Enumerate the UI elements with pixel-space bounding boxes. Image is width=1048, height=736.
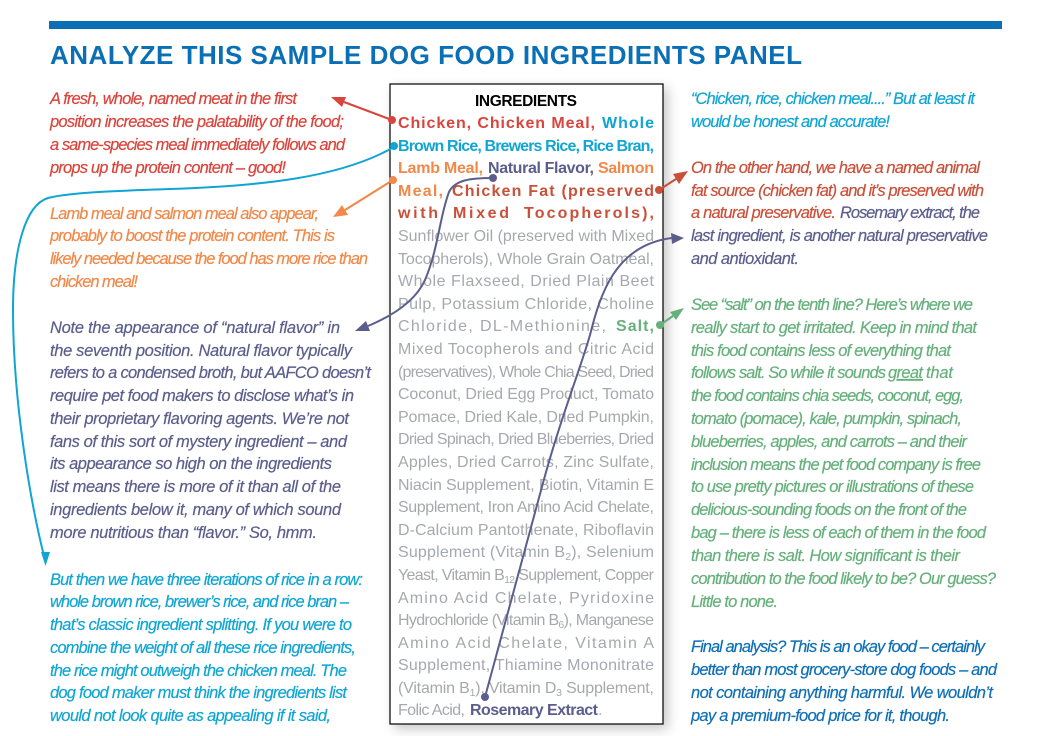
ingredients list: Pulp, Potassium Chloride, Choline [398,296,654,313]
ingredients list: Chicken Fat (preserved [452,183,654,200]
text block: salt on the tenth line (green): contribution to the food likely to be? Our guess? [691,570,997,588]
ingredients list: Brown Rice, Brewers Rice, Rice Bran, [398,138,654,155]
ingredients list: Dried Spinach, Dried Blueberries, Dried [398,431,654,448]
ingredients list: Supplement (Vitamin B [398,544,565,561]
text block: natural flavor (slate): fans of this sort of mystery ingredient – and [50,433,348,451]
arrow: lamb meal to orange note [333,176,397,217]
ingredients list: Apples, Dried Carrots, Zinc Sulfate, [398,454,654,471]
text block: honest and accurate (cyan): would be honest and accurate! [691,113,890,131]
text block: salt on the tenth line (green): to use pretty pictures or illustrations of these [691,478,974,496]
ingredients heading: INGREDIENTS [475,93,577,110]
ingredients list: Hydrochloride (Vitamin B [398,612,559,629]
ingredients list: Lamb Meal, [398,160,483,177]
text block: salt on the tenth line (green): this food contains less of everything that [691,342,952,360]
text block: chicken fat and rosemary extract: a natural preservative. [691,204,836,222]
ingredients list: Niacin Supplement, Biotin, Vitamin E [398,477,654,494]
ingredients list: 1 [470,687,476,699]
ingredients list: 6 [558,619,564,631]
text block: salt on the tenth line (green): inclusion means the pet food company is free [691,456,981,474]
text block: fresh named meat (red): A fresh, whole, named meat in the first [49,90,298,108]
arrow: natural flavor to slate note [355,174,497,331]
ingredients list: Chicken, Chicken Meal, [398,115,595,132]
ingredients list: Supplement, Iron Amino Acid Chelate, [398,499,654,516]
text block: natural flavor (slate) [50,319,372,542]
ingredients list: Salt, [616,318,654,335]
ingredients list: Chloride, DL-Methionine, [398,318,606,335]
text block: rice splitting (cyan): would not look quite as appealing if it said, [50,707,331,725]
ingredients list: Supplement, [562,680,654,697]
ingredients list: Salmon [598,160,654,177]
text block: salt on the tenth line (green) [691,296,997,611]
text block: fresh named meat (red): position increases the palatability of the food; [49,113,344,131]
ingredients list [397,115,655,719]
text block: salt on the tenth line (green): bag – there is less of each of them in the food [691,524,987,542]
text block: salt on the tenth line (green): great [888,364,924,382]
text block: salt on the tenth line (green): blueberries, apples, and carrots – and their [691,433,968,451]
arrow: salt to green note [656,308,684,329]
text block: final analysis (blue): Final analysis? This is an okay food – certainly [691,638,987,656]
ingredients list: Mixed [453,205,509,222]
ingredients list: ), Vitamin D [475,680,556,697]
ingredients list: Natural Flavor, [488,160,594,177]
text block: final analysis (blue) [690,638,998,725]
text block: salt on the tenth line (green): delicious-sounding foods on the front of the [691,501,967,519]
arrow: chicken to red note [331,97,396,124]
text block: final analysis (blue): not containing anything harmful. We wouldn’t [691,684,994,702]
text block: chicken fat and rosemary extract: Rosemary extract, the [840,204,980,222]
arrow: rosemary extract to slate note [481,233,684,701]
text block: honest and accurate (cyan) [691,90,976,131]
ingredients list: (preservatives), Whole Chia Seed, Dried [398,364,654,381]
ingredients list: . [598,702,602,719]
text block: honest and accurate (cyan): “Chicken, rice, chicken meal....” But at least it [691,90,976,108]
ingredients list: Tocopherols), Whole Grain Oatmeal, [398,251,654,268]
text block: natural flavor (slate): the seventh position. Natural flavor typically [50,342,354,360]
ingredients list: Tocopherols), [524,205,654,222]
ingredients list: Sunflower Oil (preserved with Mixed [398,228,654,245]
text block: natural flavor (slate): its appearance so high on the ingredients [50,455,332,473]
panel: ingredients box [390,84,668,729]
ingredients list: Amino Acid Chelate, Vitamin A [398,635,654,652]
text block: final analysis (blue): pay a premium-food price for it, though. [690,707,950,725]
text block: rice splitting (cyan): dog food maker must think the ingredients list [50,684,348,702]
text block: chicken fat and rosemary extract [691,159,988,268]
text block: natural flavor (slate): ingredients below it, many of which sound [50,501,342,519]
text block: salt on the tenth line (green): than there is salt. How significant is their [691,547,962,565]
text block: rice splitting (cyan): combine the weight of all these rice ingredients, [50,639,356,657]
text block: salt on the tenth line (green): that [926,364,954,382]
text block: chicken fat and rosemary extract: last ingredient, is another natural preservative [691,227,988,245]
ingredients list: ), Selenium [571,544,654,561]
text block: chicken fat and rosemary extract: fat source (chicken fat) and it’s preserved with [691,182,984,200]
text block: lamb and salmon meal (orange) [49,205,368,291]
text block: rice splitting (cyan) [50,571,363,725]
title: ANALYZE THIS SAMPLE DOG FOOD INGREDIENTS PANEL [50,40,802,70]
text block: lamb and salmon meal (orange): chicken meal! [50,273,138,291]
text block: fresh named meat (red) [49,90,346,177]
text block: natural flavor (slate): require pet food makers to disclose what’s in [50,387,354,405]
ingredients list: 2 [565,551,571,563]
ingredients list: Pomace, Dried Kale, Dried Pumpkin, [398,409,654,426]
text block: chicken fat and rosemary extract: On the other hand, we have a named animal [691,159,981,177]
text block: salt on the tenth line (green): follows salt. So while it sounds [691,364,886,382]
text block: natural flavor (slate): refers to a condensed broth, but AAFCO doesn’t [50,364,372,382]
ingredients list: Coconut, Dried Egg Product, Tomato [398,386,654,403]
text block: natural flavor (slate): more nutritious than “flavor.” So, hmm. [50,524,317,542]
text block: final analysis (blue): better than most grocery-store dog foods – and [691,661,998,679]
ingredients list: Supplement, Copper [514,567,655,584]
ingredients list: Folic Acid, [398,702,465,719]
ingredients list: Yeast, Vitamin B [398,567,505,584]
ingredients list: (Vitamin B [398,680,470,697]
text block: rice splitting (cyan): whole brown rice, brewer’s rice, and rice bran – [50,593,350,611]
ingredients list: D-Calcium Pantothenate, Riboflavin [398,522,654,539]
arrow: rice to cyan note [13,142,398,566]
text block: natural flavor (slate): list means there is more of it than all of the [50,478,341,496]
text block: salt on the tenth line (green): really start to get irritated. Keep in mind that [691,319,978,337]
text block: chicken fat and rosemary extract: and antioxidant. [691,250,799,268]
text block: rice splitting (cyan): But then we have three iterations of rice in a row: [50,571,363,589]
ingredients list: Whole [602,115,654,132]
ingredients list: Whole Flaxseed, Dried Plain Beet [398,273,655,290]
text block: natural flavor (slate): Note the appearance of “natural flavor” in [50,319,340,337]
text block: lamb and salmon meal (orange): probably to boost the protein content. This is [49,227,335,245]
text block: salt on the tenth line (green): tomato (pomace), kale, pumpkin, spinach, [691,410,962,428]
text block: rice splitting (cyan): that’s classic ingredient splitting. If you were to [50,616,352,634]
ingredients list: with [397,205,438,222]
text block: salt on the tenth line (green): the food contains chia seeds, coconut, egg, [691,387,964,405]
ingredients list: Amino Acid Chelate, Pyridoxine [398,590,654,607]
text block: rice splitting (cyan): the rice might outweigh the chicken meal. The [50,662,347,680]
text block: lamb and salmon meal (orange): likely needed because the food has more rice than [50,250,368,268]
ingredients list: 3 [556,687,562,699]
ingredients list: Meal, [398,183,443,200]
text block: natural flavor (slate): their proprietary flavoring agents. We’re not [50,410,350,428]
text block: fresh named meat (red): props up the protein content – good! [49,159,286,177]
ingredients list: Mixed Tocopherols and Citric Acid [398,341,654,358]
ingredients list: 12 [504,574,515,586]
header bar [49,21,1002,29]
text block: salt on the tenth line (green): Little to none. [691,593,778,611]
text block: salt on the tenth line (green): See “salt” on the tenth line? Here’s where we [691,296,973,314]
text block: fresh named meat (red): a same-species meal immediately follows and [50,136,346,154]
ingredients list: Rosemary Extract [470,702,599,719]
arrow: chicken fat to brick note [655,171,688,194]
ingredients list: ), Manganese [564,612,654,629]
ingredients list: Supplement, Thiamine Mononitrate [398,657,654,674]
text block: lamb and salmon meal (orange): Lamb meal and salmon meal also appear, [50,205,319,223]
